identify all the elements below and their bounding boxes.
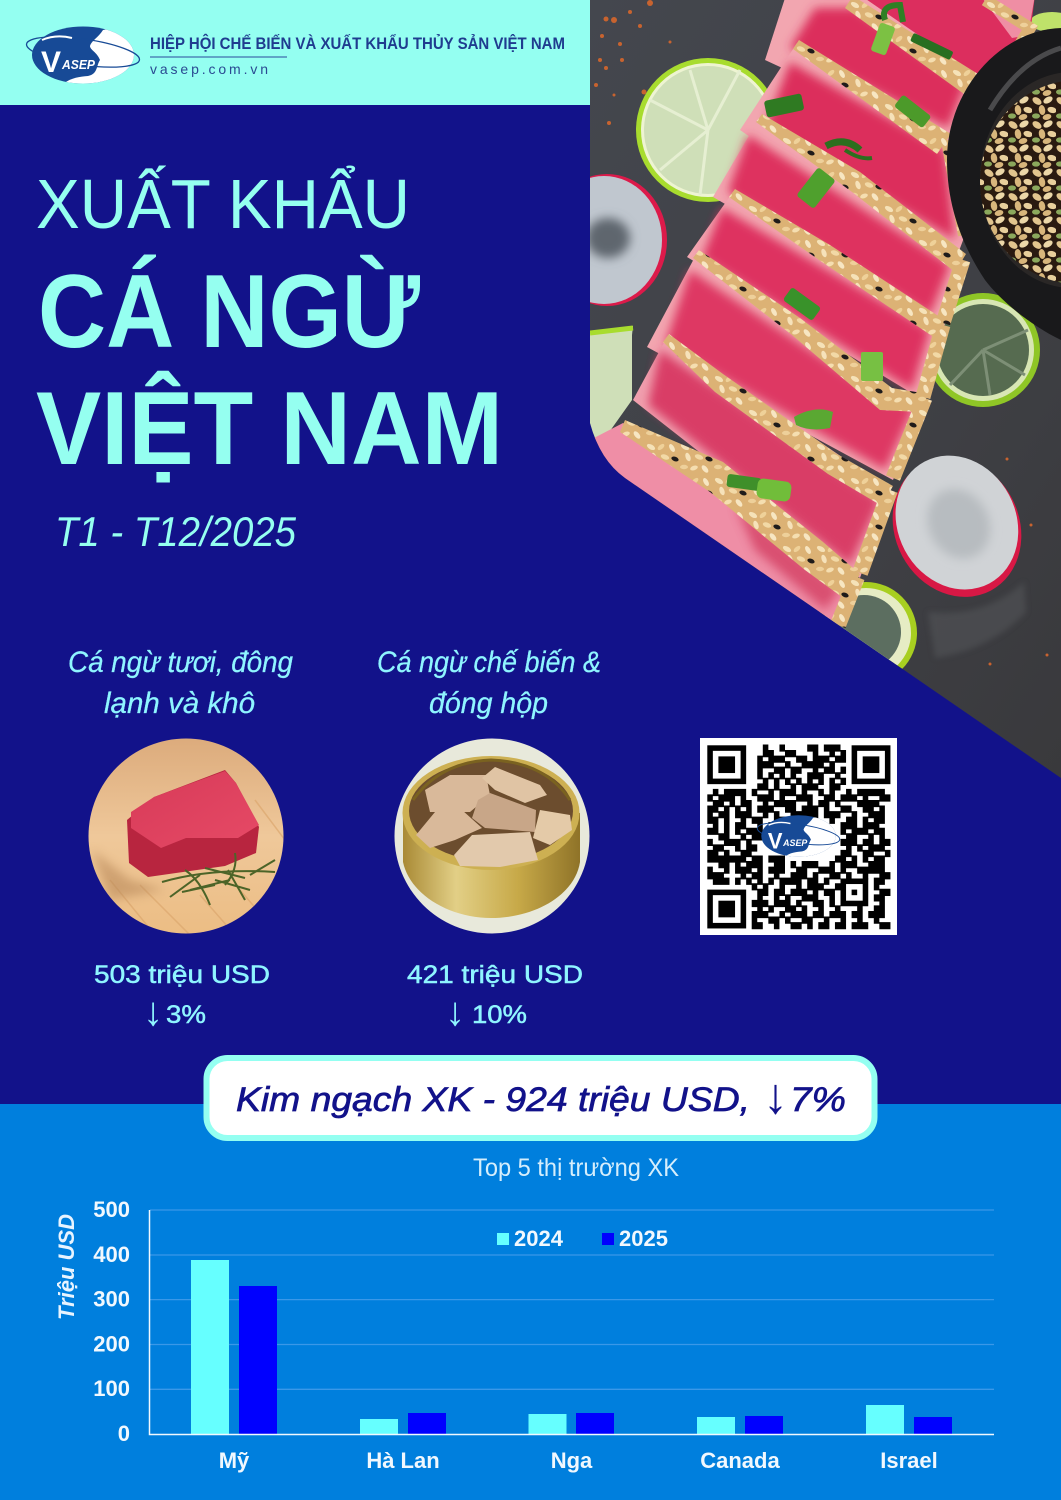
- tuna slice 0: [867, 0, 1038, 74]
- sauce bowl: [947, 28, 1061, 340]
- callout: total export value: Kim ngạch XK - 924 triệu USD,: [236, 1081, 750, 1119]
- product heading: processed canned tuna: đóng hộp: [429, 687, 548, 720]
- lime slice bottom: [820, 582, 917, 669]
- photo: canned tuna: [394, 738, 590, 934]
- lime slice upper left: [636, 58, 780, 202]
- date range: T1 - T12/2025: [55, 508, 297, 555]
- stat: fresh frozen value: ↓: [143, 990, 163, 1034]
- callout: total export value: [206, 1058, 874, 1138]
- y axis labels: 100: [93, 1376, 130, 1401]
- stat: fresh frozen value: [94, 961, 270, 1034]
- y axis labels: 200: [93, 1332, 130, 1356]
- stat: canned value: [407, 961, 583, 1034]
- x axis labels: Israel: [880, 1448, 938, 1473]
- organisation name: HIỆP HỘI CHẾ BIẾN VÀ XUẤT KHẨU THỦY SẢN VIỆT NAM: [150, 34, 565, 53]
- product heading: fresh frozen dried tuna: lạnh và khô: [104, 687, 255, 720]
- QR code: [700, 738, 897, 935]
- lime slice lower right: [926, 293, 1040, 407]
- bars: Nga: [528, 1413, 614, 1434]
- stat: canned value: 421 triệu USD: [407, 961, 583, 989]
- bars: Israel: [866, 1405, 952, 1434]
- logo: VASEP: ASEP: [61, 57, 95, 72]
- chart title: Top 5 thị trường XK: [473, 1154, 679, 1182]
- y axis labels: 0: [118, 1421, 130, 1446]
- QR centre logo: V: [768, 828, 783, 853]
- product heading: fresh frozen dried tuna: Cá ngừ tươi, đông: [68, 646, 293, 679]
- stat: canned value: 10%: [472, 1001, 527, 1029]
- legend: 2025: [619, 1226, 668, 1251]
- green onion pieces: [726, 5, 954, 502]
- y axis labels: 500: [93, 1197, 130, 1222]
- bars: Canada: [697, 1416, 783, 1434]
- y axis labels: 300: [93, 1286, 130, 1312]
- radish slice left: [590, 174, 667, 306]
- panel: header band: [0, 0, 590, 105]
- radish slice right: [892, 456, 1022, 597]
- title: XUẤT KHẨU: [36, 164, 410, 243]
- panel: hero photo of seared tuna: [546, 0, 1061, 780]
- bars: Mỹ: [191, 1260, 277, 1434]
- panel: chart background: [0, 1104, 1061, 1500]
- tuna slice 7: [590, 420, 860, 630]
- x axis labels: Nga: [551, 1448, 593, 1473]
- y axis labels: 400: [93, 1242, 130, 1267]
- legend: 2024: [514, 1226, 564, 1251]
- y axis labels: [93, 1197, 130, 1446]
- photo: raw tuna steak: [88, 738, 285, 935]
- logo: VASEP: [26, 26, 140, 84]
- background: navy panel: [0, 0, 1061, 1104]
- spice speckles: [594, 0, 1048, 666]
- stat: fresh frozen value: 3%: [166, 1001, 206, 1029]
- x axis labels: Hà Lan: [366, 1448, 440, 1473]
- lime slice left: [590, 326, 633, 445]
- stat: fresh frozen value: 503 triệu USD: [94, 961, 270, 989]
- y axis title: Triệu USD: [54, 1214, 79, 1320]
- stat: canned value: ↓: [445, 990, 465, 1034]
- tuna slice 5: [647, 250, 928, 480]
- tuna slice 2: [740, 40, 964, 250]
- x axis labels: [219, 1448, 938, 1473]
- logo: VASEP: V: [41, 46, 61, 79]
- QR centre logo: [756, 815, 840, 857]
- x axis labels: Mỹ: [219, 1448, 250, 1473]
- tuna slice 1: [765, 0, 978, 150]
- title: VIỆT NAM: [36, 371, 503, 487]
- tuna slice 3: [713, 114, 966, 330]
- title: [36, 164, 503, 487]
- x axis labels: Canada: [700, 1448, 780, 1473]
- product heading: processed canned tuna: [377, 646, 601, 720]
- water stain: [930, 586, 1025, 656]
- product heading: fresh frozen dried tuna: [68, 646, 293, 720]
- title: CÁ NGỪ: [38, 254, 421, 370]
- product heading: processed canned tuna: Cá ngừ chế biến &: [377, 646, 601, 679]
- bar chart: top 5 markets: [54, 1197, 994, 1473]
- callout: total export value: 7%: [790, 1081, 846, 1119]
- callout: total export value: ↓: [763, 1068, 788, 1124]
- tuna slice 4: [687, 189, 946, 400]
- bars: Hà Lan: [360, 1413, 446, 1434]
- website: vasep.com.vn: [150, 61, 268, 77]
- tuna slice 6: [633, 334, 893, 578]
- lime slice top right: [1030, 12, 1061, 32]
- QR centre logo: ASEP: [782, 838, 808, 849]
- legend: [497, 1226, 668, 1251]
